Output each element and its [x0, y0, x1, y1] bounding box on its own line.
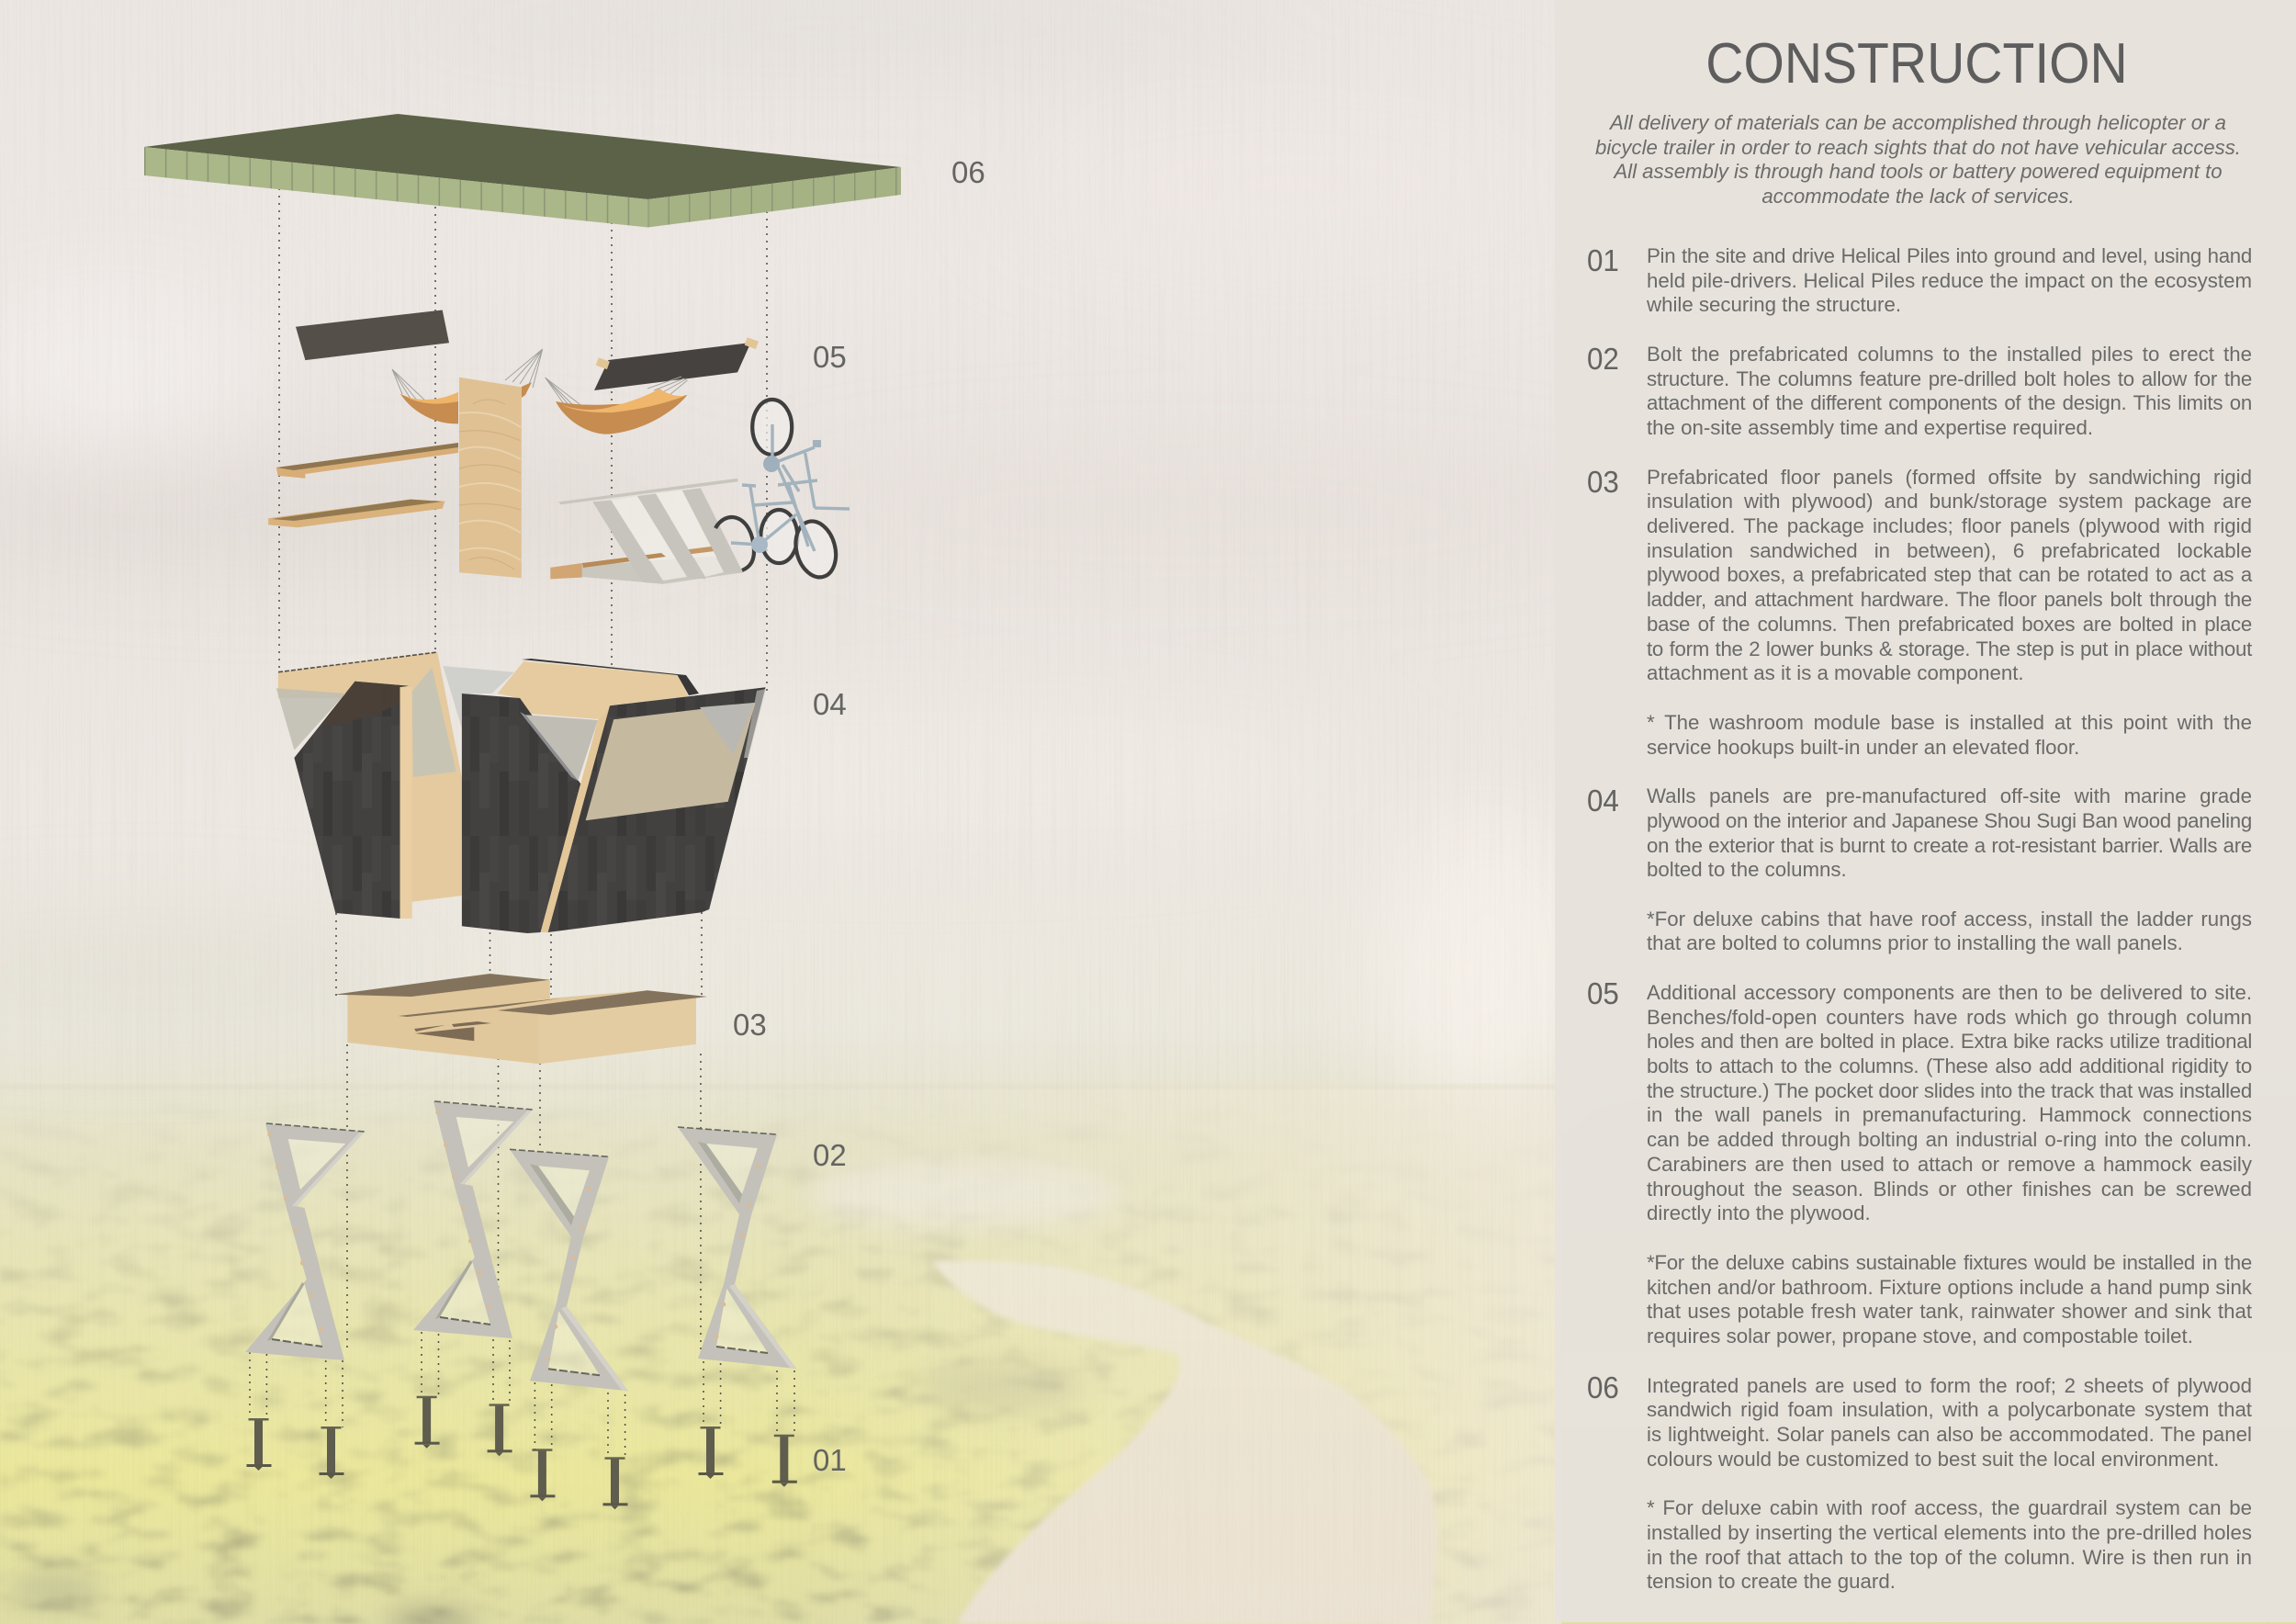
step 06: colours would be customized to best suit the local environment.	[1647, 1448, 2219, 1471]
step 01: while securing the structure.	[1647, 293, 1901, 316]
step 04: 04	[1587, 784, 1619, 818]
step 06: Integrated panels are used to form the roof; 2 sheets of plywood	[1647, 1374, 2252, 1397]
panel: construction text background	[1555, 0, 2296, 1622]
step 03: base of the columns. Then prefabricated boxes are bolted in place	[1647, 613, 2252, 636]
exploded axonometric construction diagram	[144, 114, 985, 1510]
step 02: 02	[1587, 342, 1619, 376]
title: CONSTRUCTION	[1705, 32, 2128, 96]
diagram step labels: 02	[813, 1138, 847, 1172]
step 04: plywood on the interior and Japanese Shou Sugi Ban wood paneling	[1647, 809, 2252, 832]
step 06: is lightweight. Solar panels can also be accommodated. The panel	[1647, 1423, 2252, 1446]
step 03: 03	[1587, 465, 1619, 499]
step 03: attachment as it is a movable component.	[1647, 661, 2024, 684]
step 05: the structure.) The pocket door slides into the track that was installed	[1647, 1079, 2252, 1102]
diagram step labels: 04	[813, 687, 847, 721]
step 01: Pin the site and drive Helical Piles into ground and level, using hand	[1647, 244, 2252, 267]
step 03: Prefabricated floor panels (formed offsite by sandwiching rigid	[1647, 466, 2252, 489]
step 04: Walls panels are pre-manufactured off-site with marine grade	[1647, 784, 2252, 807]
step 04: that are bolted to columns prior to installing the wall panels.	[1647, 931, 2183, 954]
step 05: bolts to attach to the columns. (These also add additional rigidity to	[1647, 1054, 2252, 1077]
step 05: can be added through bolting an industrial o-ring into the column.	[1647, 1128, 2252, 1151]
05 shutter panels	[296, 310, 759, 390]
diagram step labels: 03	[733, 1008, 767, 1042]
04 wall assembly	[276, 652, 766, 933]
step 06: tension to create the guard.	[1647, 1570, 1896, 1593]
step 02: structure. The columns feature pre-drilled bolt holes to allow for the	[1647, 367, 2252, 390]
step 03: delivered. The package includes; floor panels (plywood with rigid	[1647, 514, 2252, 537]
step 03	[1587, 465, 2252, 759]
intro text: bicycle trailer in order to reach sights that do not have vehicular access.	[1595, 136, 2241, 159]
step 03: insulation sandwiched in between), 6 prefabricated lockable	[1647, 539, 2252, 562]
step 05	[1587, 976, 2252, 1348]
dashed assembly guide lines	[250, 188, 794, 1458]
step 03: to form the 2 lower bunks & storage. The step is put in place without	[1647, 637, 2252, 660]
step 05: kitchen and/or bathroom. Fixture options include a hand pump sink	[1647, 1276, 2252, 1299]
step 05: directly into the plywood.	[1647, 1201, 1871, 1224]
01 helical piles	[246, 1396, 797, 1509]
03 floor panels and storage boxes	[334, 974, 707, 1064]
step 05: Carabiners are then used to attach or remove a hammock easily	[1647, 1153, 2252, 1176]
step 01: 01	[1587, 243, 1619, 277]
step 03: plywood boxes, a prefabricated step that can be rotated to act as a	[1647, 563, 2252, 586]
step 06: installed by inserting the vertical elements into the pre-drilled holes	[1647, 1521, 2252, 1544]
05 benches	[268, 443, 458, 527]
step 06	[1587, 1370, 2252, 1593]
step 06: sandwich rigid foam insulation, with a polycarbonate system that	[1647, 1398, 2252, 1421]
step 03: service hookups built-in under an elevated floor.	[1647, 735, 2079, 759]
step 06: in the roof that attach to the top of the column. Wire is then run in	[1647, 1546, 2252, 1569]
step 05: 05	[1587, 976, 1619, 1010]
step 05: holes and then are bolted in place. Extra bike racks utilize traditional	[1647, 1030, 2252, 1053]
06 roof panel	[144, 114, 901, 228]
step 01	[1587, 243, 2252, 316]
step 03: insulation with plywood) and bunk/storage system package are	[1647, 490, 2252, 513]
step 04: on the exterior that is burnt to create a rot-resistant barrier. Walls are	[1647, 834, 2252, 857]
05 bicycles	[715, 400, 850, 581]
diagram step labels: 01	[813, 1443, 847, 1477]
intro text: accommodate the lack of services.	[1761, 185, 2075, 208]
step 01: held pile-drivers. Helical Piles reduce the impact on the ecosystem	[1647, 269, 2252, 292]
step 05: requires solar power, propane stove, and compostable toilet.	[1647, 1325, 2193, 1348]
step 02	[1587, 342, 2252, 439]
step 06: * For deluxe cabin with roof access, the guardrail system can be	[1647, 1496, 2252, 1519]
step 03: ladder, and attachment hardware. The floor panels bolt through the	[1647, 588, 2252, 611]
02 columns	[245, 1101, 796, 1391]
step 05: Benches/fold-open counters have rods which go through column	[1647, 1006, 2252, 1029]
diagram step labels: 05	[813, 340, 847, 374]
intro text: All assembly is through hand tools or battery powered equipment to	[1614, 160, 2223, 183]
step 05: throughout the season. Blinds or other finishes can be screwed	[1647, 1178, 2252, 1201]
intro text	[1595, 111, 2241, 208]
step 03: * The washroom module base is installed at this point with the	[1647, 711, 2252, 734]
step 02: Bolt the prefabricated columns to the installed piles to erect the	[1647, 343, 2252, 366]
05 plywood column panel	[459, 378, 522, 578]
step 04: bolted to the columns.	[1647, 858, 1847, 881]
05 bike rack	[550, 479, 743, 584]
step 02: attachment of the different components of the design. This limits on	[1647, 391, 2252, 414]
step 05: that uses potable fresh water tank, rainwater shower and sink that	[1647, 1300, 2252, 1323]
intro text: All delivery of materials can be accomplished through helicopter or a	[1610, 111, 2226, 134]
step 04	[1587, 784, 2252, 954]
diagram step labels: 06	[951, 155, 985, 189]
step 04: *For deluxe cabins that have roof access, install the ladder rungs	[1647, 908, 2252, 930]
step 05: *For the deluxe cabins sustainable fixtures would be installed in the	[1647, 1251, 2252, 1274]
step 05: in the wall panels in premanufacturing. Hammock connections	[1647, 1103, 2252, 1126]
05 hammocks	[392, 349, 687, 434]
step 05: Additional accessory components are then to be delivered to site.	[1647, 981, 2252, 1004]
diagram step labels	[733, 155, 985, 1477]
step 06: 06	[1587, 1370, 1619, 1404]
step 02: the on-site assembly time and expertise required.	[1647, 416, 2093, 439]
